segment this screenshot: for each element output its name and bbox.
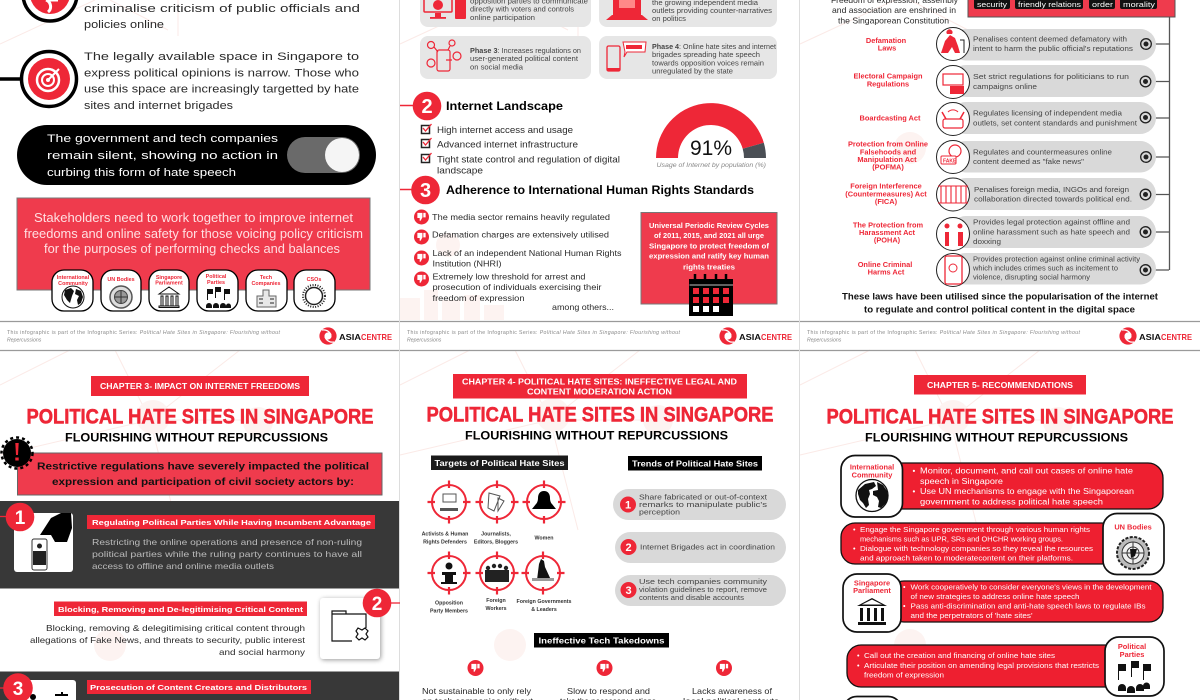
band 1: regulating political parties: Restricting the online operations and presence of non-ruling <box>92 538 363 547</box>
footer: middle: Repercussions <box>407 338 442 344</box>
dividers <box>0 322 1200 350</box>
recommendation: Singapore parliament <box>843 574 1163 632</box>
text: closing statement: to regulate and control political content in the digital space <box>864 304 1135 316</box>
chapter tag <box>914 375 1086 394</box>
section 3 heading: 3 <box>420 180 431 202</box>
band 1: regulating political parties: political parties while the ruling party continues to have all <box>92 550 362 559</box>
checklist: landscape <box>437 166 483 176</box>
title: FLOURISHING WITHOUT REPURCUSSIONS <box>865 432 1128 444</box>
callout: restrictive regulations <box>18 453 382 495</box>
card: Singapore Parliament: Parliament <box>155 280 183 286</box>
trends list: 2 <box>625 542 632 554</box>
row labels: (FICA) <box>875 197 898 206</box>
icon: chain circle <box>23 0 77 21</box>
row labels: Protection from Online <box>848 140 928 148</box>
card: UN bodies <box>101 270 141 311</box>
red box with restriction tags: friendly relations <box>1018 0 1081 9</box>
takedown reasons: Slow to respond and <box>567 687 650 696</box>
card: UN bodies: UN Bodies <box>107 277 135 283</box>
targets grid: Workers <box>485 606 507 612</box>
heading: targets <box>431 456 568 470</box>
recommendation: international community: International <box>850 462 894 472</box>
recommendation: political parties: • <box>857 661 860 670</box>
recommendation: political parties <box>847 637 1164 696</box>
trends list <box>613 489 786 606</box>
callout: UPR red box: Universal Periodic Review Cycles <box>649 221 769 230</box>
red box with restriction tags: security <box>977 0 1007 9</box>
row labels: Boardcasting Act <box>860 114 921 122</box>
panel: legal framework (top right) <box>831 0 1175 316</box>
text: criminalise <box>84 3 360 31</box>
title: POLITICAL HATE SITES IN SINGAPORE <box>426 404 774 426</box>
footer: right: Repercussions <box>807 338 842 344</box>
row descriptions: Penalises foreign media, INGOs and foreign <box>974 185 1129 194</box>
recommendation: international community: Community <box>852 470 893 480</box>
callout: black pill with toggle: remain silent, showing no action in <box>47 150 278 162</box>
chapter tag <box>453 374 747 398</box>
card: Singapore Parliament <box>149 270 189 311</box>
band 1: regulating political parties <box>0 501 399 588</box>
card: CSOs <box>294 270 335 311</box>
row labels: Falsehoods and <box>860 148 917 156</box>
phase 2 card: on politics <box>652 14 686 23</box>
recommendation: UN bodies: • <box>853 525 856 534</box>
trends list: remarks to manipulate public's <box>639 500 767 509</box>
text: constitution: the Singaporean Constitution <box>838 16 949 26</box>
row labels: Laws <box>878 44 896 52</box>
trends list: 1 <box>625 500 631 512</box>
footer: middle: CENTRE <box>761 332 792 342</box>
phase 4 card <box>599 36 777 79</box>
trends list: Use tech companies community <box>639 577 767 586</box>
takedown reasons <box>422 660 779 700</box>
row labels: Electoral Campaign <box>854 72 923 80</box>
card: political parties: Parties <box>207 280 225 286</box>
title: POLITICAL HATE SITES IN SINGAPORE <box>26 406 374 428</box>
bullet list with thumbs-down icons: Lack of an independent National Human Rights <box>432 249 622 258</box>
connector line <box>1146 17 1170 270</box>
targets grid: Foreign Governments <box>516 599 572 605</box>
phase 4 card: unregulated by the state <box>652 66 733 76</box>
trends list: contents and disable accounts <box>639 593 744 602</box>
targets grid: Party Members <box>430 608 468 614</box>
phase 2 card: outlets providing counter-narratives <box>652 6 772 15</box>
row descriptions: Provides legal protection against offline and <box>973 218 1130 226</box>
gauge chart: 91%: 91% <box>690 137 732 160</box>
text: legally available space: The legally available space in Singapore to <box>84 51 359 63</box>
chapter tag: CHAPTER 5- RECOMMENDATIONS <box>927 381 1074 390</box>
recommendation: political parties: Political <box>1118 642 1146 651</box>
band 2: blocking content: allegations of Fake News, and threats to security, public interest <box>30 636 306 645</box>
bullet list with thumbs-down icons: Institution (NHRI) <box>432 260 502 268</box>
card: tech companies: Tech <box>260 275 272 281</box>
band 1: regulating political parties: Regulating Political Parties While Having Incumbent Advantage <box>92 518 371 527</box>
bullet list with thumbs-down icons <box>414 210 622 312</box>
title <box>26 406 374 444</box>
band 2: blocking content: Blocking, Removing and De-legitimising Critical Content <box>58 605 304 614</box>
trends list: perception <box>639 508 680 516</box>
phase 3 card: user-generated political content <box>470 54 579 63</box>
trends list: 3 <box>625 585 632 597</box>
recommendation: political parties: freedom of expression <box>864 670 944 680</box>
recommendation: international community: Use UN mechanisms to engage with the Singaporean <box>920 487 1134 496</box>
bullet list with thumbs-down icons: Extremely low threshold for arrest and <box>432 272 586 282</box>
phase 1 card <box>420 0 591 27</box>
targets grid: Opposition <box>435 600 463 606</box>
recommendation: UN bodies: mechanisms such as UPR, SRs and OHCHR working groups. <box>860 534 1063 544</box>
row descriptions: Penalises content deemed defamatory with <box>973 34 1127 44</box>
recommendation: UN bodies: Engage the Singapore government through various human rights <box>860 525 1090 534</box>
checklist: High internet access and usage <box>437 125 573 135</box>
bullet list with thumbs-down icons: The media sector remains heavily regulated <box>432 213 610 222</box>
trends list: Internet Brigades act in coordination <box>640 542 775 552</box>
band 3: prosecution <box>0 672 399 700</box>
section 2 heading <box>400 92 563 120</box>
text: legally available space: sites and internet brigades <box>84 100 234 112</box>
footer: right <box>807 327 1192 345</box>
recommendation: Singapore parliament: and the perpetrators of 'hate sites' <box>910 611 1033 620</box>
footer: right: CENTRE <box>1161 332 1192 342</box>
recommendation: political parties: Call out the creation and financing of online hate sites <box>864 651 1055 660</box>
icon: UN emblem <box>1117 537 1149 569</box>
text: constitution <box>831 0 959 26</box>
row descriptions: content deemed as "fake news" <box>973 157 1084 166</box>
row descriptions: Regulates licensing of independent media <box>973 108 1123 118</box>
section 2 heading: 2 <box>421 96 433 118</box>
recommendation: political parties: Articulate their position on amending legal provisions that restricts <box>864 661 1099 670</box>
recommendation: UN bodies <box>841 514 1164 574</box>
stakeholder cards <box>52 270 335 311</box>
callout: UPR red box: rights treaties <box>683 262 735 272</box>
panel: chapter 3 impact <box>0 376 400 700</box>
targets grid: Foreign <box>486 598 506 604</box>
text: criminalise: policies online <box>84 19 164 31</box>
recommendation: UN bodies: • <box>853 544 856 553</box>
row descriptions: campaigns online <box>973 82 1037 91</box>
row labels: Regulations <box>867 80 909 88</box>
heading: ineffective takedowns: Ineffective Tech Takedowns <box>538 636 665 646</box>
targets grid: Women <box>534 536 554 542</box>
row labels: Online Criminal <box>858 260 912 269</box>
phase 3 card: on social media <box>470 62 524 72</box>
row descriptions: intent to harm the public official's reputations <box>973 44 1133 53</box>
row icons: FAKE <box>943 158 957 164</box>
card: tech companies <box>246 270 287 311</box>
recommendation: UN bodies: Dialogue with technology companies so they reveal the resources <box>860 544 1093 553</box>
icon: pointing hand and phone <box>32 513 72 570</box>
phase 4 card: towards opposition voices remain <box>652 58 764 68</box>
text: legally available space: use this space are increasingly targetted by hate <box>84 84 359 96</box>
title: FLOURISHING WITHOUT REPURCUSSIONS <box>465 430 728 442</box>
recommendation: Singapore parliament: • <box>903 582 906 592</box>
card: international community: International <box>57 275 90 281</box>
heading: ineffective takedowns <box>534 633 669 648</box>
callout: restrictive regulations: Restrictive regulations have severely impacted the political <box>37 462 369 472</box>
row labels: (POHA) <box>874 236 901 244</box>
text: legally available space: express political opinions is narrow. Those who <box>84 68 359 80</box>
callout: stakeholders red box <box>17 198 370 290</box>
row labels: (Countermeasures) Act <box>845 190 927 198</box>
red box with restriction tags <box>968 0 1175 17</box>
recommendation: international community: • <box>912 487 916 496</box>
title: FLOURISHING WITHOUT REPURCUSSIONS <box>65 432 328 444</box>
phase 4 card: Phase 4: Online hate sites and internet <box>652 42 777 51</box>
band 1: regulating political parties: access to offline and online media outlets <box>92 562 274 571</box>
targets grid: Rights Defenders <box>423 540 467 546</box>
phase 1 card: online participation <box>470 13 535 22</box>
band 2: blocking content <box>30 589 400 659</box>
callout: stakeholders red box: freedoms and online safety for those voicing policy criticism <box>24 227 363 241</box>
chapter tag: CHAPTER 3- IMPACT ON INTERNET FREEDOMS <box>100 382 301 391</box>
callout: black pill with toggle: The government and tech companies <box>47 133 278 145</box>
recommendation: international community: • <box>912 466 916 476</box>
icon: alert seal <box>2 438 32 468</box>
card: Singapore Parliament: Singapore <box>156 275 182 281</box>
panel: chapter 5 recommendations <box>826 375 1174 700</box>
row labels: The Protection from <box>853 220 924 230</box>
callout: stakeholders red box: Stakeholders need to work together to improve internet <box>34 211 354 225</box>
recommendation: political parties: Parties <box>1120 650 1144 659</box>
phase 3 card <box>420 36 591 79</box>
panel: chapter 2 summary (top left) <box>0 0 376 311</box>
footer: left <box>7 327 392 345</box>
row labels: Foreign Interference <box>850 182 922 190</box>
card: CSOs: CSOs <box>307 277 321 283</box>
targets grid <box>422 480 572 614</box>
checklist <box>422 124 620 176</box>
takedown reasons: Not sustainable to only rely <box>422 687 532 696</box>
chapter tag: CONTENT MODERATION ACTION <box>527 388 672 396</box>
text: legally available space <box>84 51 359 112</box>
recommendation: Singapore parliament: Parliament <box>853 586 891 595</box>
law rows <box>845 28 1156 286</box>
targets grid: & Leaders <box>531 607 557 613</box>
row descriptions: outlets, set content standards and punishment <box>973 118 1138 128</box>
callout: stakeholders red box: for the purposes of performing checks and balances <box>44 242 340 256</box>
card: international community <box>52 270 93 311</box>
footer: right: This infographic is part of the Infographic Series: Political Hate Sites in Singapore: Flourishing without <box>807 330 1081 336</box>
footer: left: ASIA <box>339 332 361 342</box>
chapter tag: CHAPTER 4- POLITICAL HATE SITES: INEFFECTIVE LEGAL AND <box>462 378 737 386</box>
section 2 heading: Internet Landscape <box>446 99 563 113</box>
band 2: blocking content: 2 <box>372 594 382 615</box>
callout: UPR red box: expression and ratify key human <box>649 252 769 260</box>
text: criminalise: criminalise criticism of public officials and <box>84 3 360 15</box>
gauge chart: 91% <box>656 103 766 169</box>
row descriptions: Set strict regulations for politicians to run <box>973 72 1129 81</box>
text: constitution: and association are enshrined in <box>832 5 956 15</box>
row labels: Harms Act <box>868 268 905 276</box>
recommendation: international community: government to address political hate speech <box>920 498 1103 506</box>
row icons <box>938 29 968 284</box>
heading: targets: Targets of Political Hate Sites <box>434 459 565 468</box>
footer: middle: ASIA <box>739 332 761 342</box>
bullet list with thumbs-down icons: among others... <box>552 303 614 312</box>
row descriptions <box>972 34 1140 282</box>
recommendation: Singapore parliament: of new strategies to address online hate speech <box>910 592 1080 601</box>
checklist: Advanced internet infrastructure <box>437 140 578 150</box>
section 3 heading: Adherence to International Human Rights Standards <box>446 183 754 197</box>
title <box>826 406 1174 444</box>
targets grid: Journalists, <box>481 532 511 538</box>
red box with restriction tags: morality <box>1123 0 1155 9</box>
bullet list with thumbs-down icons: freedom of expression <box>432 294 525 303</box>
checklist: Tight state control and regulation of digital <box>437 154 620 164</box>
recommendation: political parties: • <box>857 651 860 660</box>
band 2: blocking content: and social harmony <box>219 648 306 657</box>
callout: restrictive regulations: expression and participation of civil society actors by: <box>52 477 354 488</box>
targets grid: Activists & Human <box>422 532 468 538</box>
row descriptions: online harassment such as hate speech and <box>973 228 1130 236</box>
card: political parties <box>197 270 238 311</box>
row labels: Manipulation Act <box>857 155 917 164</box>
band 2: blocking content: Blocking, removing & delegitimising critical content through <box>46 624 306 633</box>
next card top <box>845 696 900 700</box>
recommendation: Singapore parliament: • <box>903 602 906 610</box>
row descriptions: doxxing <box>973 237 1001 246</box>
recommendation: international community <box>841 456 1163 517</box>
heading: trends <box>628 456 762 470</box>
recommendation: Singapore parliament: Singapore <box>854 578 890 588</box>
bullet list with thumbs-down icons: Defamation charges are extensively utilised <box>432 230 609 240</box>
heading: trends: Trends of Political Hate Sites <box>632 460 759 468</box>
row labels: (POFMA) <box>872 162 904 172</box>
icon: folder with x <box>332 611 368 641</box>
title <box>426 404 774 442</box>
phase 1 card: directly with voters and controls <box>470 4 574 14</box>
footer: middle: This infographic is part of the Infographic Series: Political Hate Sites in Singapore: Flourishing without <box>407 330 681 336</box>
callout: black pill with toggle <box>17 125 376 185</box>
band 3: prosecution: Prosecution of Content Creators and Distributors <box>90 683 307 692</box>
recommendation: UN bodies: UN Bodies <box>1114 522 1152 532</box>
panel: phases and standards (top middle) <box>400 0 777 316</box>
recommendation: international community: speech in Singapore <box>920 477 1004 486</box>
takedown reasons: Lacks awareness of <box>692 687 773 696</box>
trends list: violation guidelines to report, remove <box>639 585 767 594</box>
targets grid: Editors, Bloggers <box>474 540 518 546</box>
recommendation: UN bodies: and approach taken to moderatecontent on their platforms. <box>860 554 1073 562</box>
row labels: Harassment Act <box>859 228 916 237</box>
footer: left: Repercussions <box>7 338 42 344</box>
row labels: Defamation <box>866 36 907 45</box>
row labels <box>845 36 928 276</box>
row descriptions: which includes crimes such as incitement to <box>972 264 1118 272</box>
callout: black pill with toggle: curbing this form of hate speech <box>47 167 236 179</box>
text: closing statement: These laws have been utilised since the popularisation of the internet <box>842 292 1159 302</box>
footer: middle <box>407 327 792 345</box>
band 3: prosecution: 3 <box>13 679 23 700</box>
panel: chapter 4 legal and moderation <box>422 374 786 700</box>
trends list: Share fabricated or out-of-context <box>639 492 768 502</box>
card: tech companies: Companies <box>251 281 281 287</box>
phase 3 card: Phase 3: Increases regulations on <box>470 46 581 55</box>
footer: right: ASIA <box>1139 332 1161 342</box>
text: closing statement <box>842 292 1159 316</box>
row descriptions: violence, disrupting social harmony <box>973 272 1090 282</box>
footer: left: This infographic is part of the Infographic Series: Political Hate Sites in Singapore: Flourishing without <box>7 330 281 336</box>
bullet list with thumbs-down icons: prosecution of individuals exercising their <box>432 283 602 292</box>
red box with restriction tags: order <box>1092 0 1114 9</box>
callout: UPR red box <box>641 212 777 316</box>
recommendation: international community: Monitor, document, and call out cases of online hate <box>920 466 1134 476</box>
icon: calendar <box>689 274 733 316</box>
card: international community: Community <box>58 281 88 287</box>
recommendation: Singapore parliament: Pass anti-discrimination and anti-hate speech laws to regulate IBs <box>910 602 1146 610</box>
phase 2 card <box>599 0 777 27</box>
recommendation: Singapore parliament: Work cooperatively to consider everyone's views in the development <box>910 582 1152 592</box>
gauge chart: 91%: Usage of Internet by population (%) <box>656 163 766 169</box>
callout: UPR red box: Singapore to protect freedom of <box>649 242 770 250</box>
card: political parties: Political <box>206 274 227 280</box>
section 3 heading <box>400 176 754 204</box>
band 1: regulating political parties: 1 <box>15 508 26 529</box>
icon: globe <box>856 480 888 512</box>
callout: UPR red box: of 2011, 2015, and 2021 all urge <box>654 231 764 240</box>
footer: left: CENTRE <box>361 332 392 342</box>
row descriptions: Provides protection against online criminal activity <box>973 254 1140 264</box>
chapter tag <box>91 376 309 396</box>
row descriptions: collaboration directed towards political end. <box>974 194 1132 204</box>
icon: target circle <box>0 52 76 106</box>
row descriptions: Regulates and countermeasures online <box>973 148 1112 156</box>
phase 4 card: brigades spreading hate speech <box>652 50 760 59</box>
